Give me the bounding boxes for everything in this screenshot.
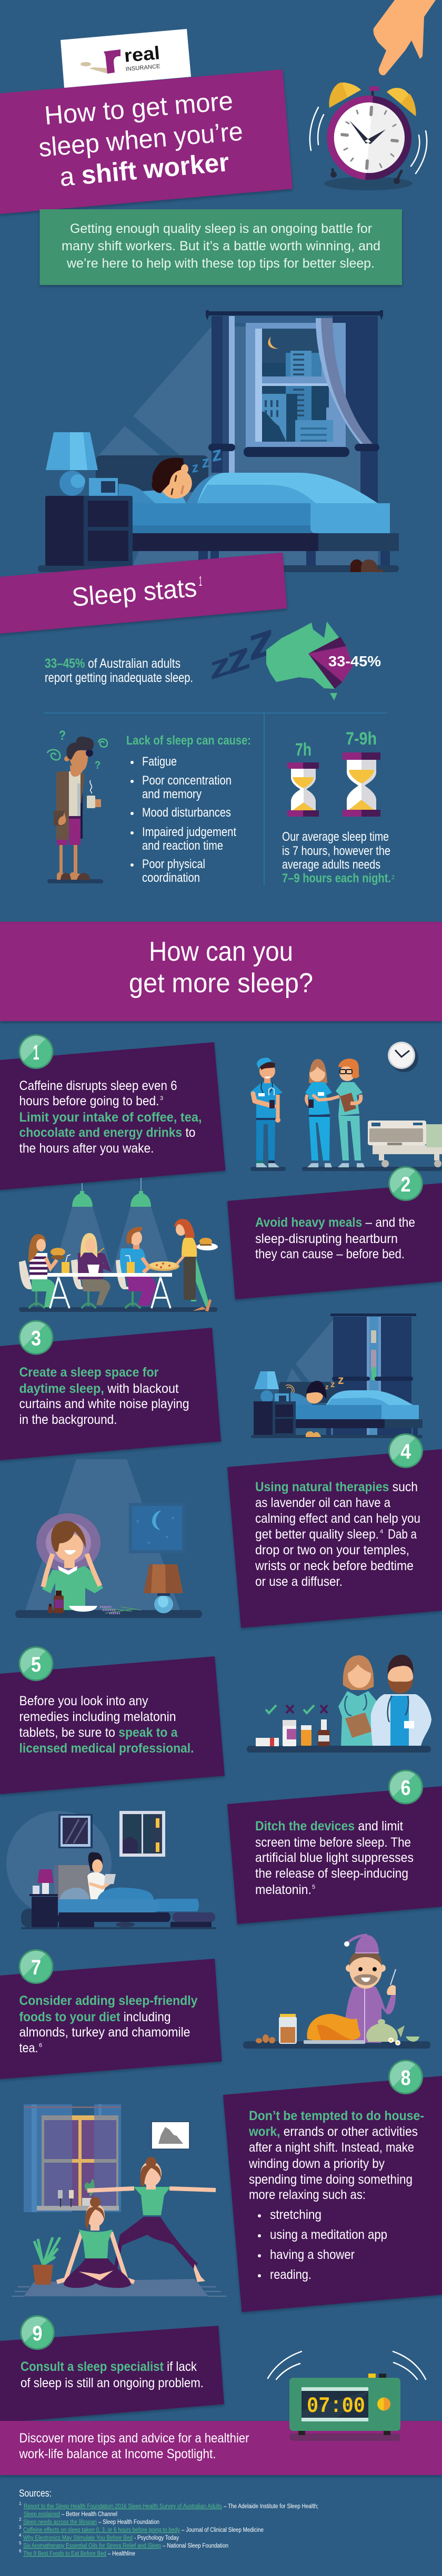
blackout curtains <box>330 1314 416 1435</box>
closing banner <box>0 2421 442 2475</box>
illustration: daytime sleeper with blackout curtains <box>251 1314 423 1438</box>
banner: sleep stats: 1 <box>199 573 202 589</box>
clock display: 07:00 <box>307 2394 365 2419</box>
illustration: people eating at table <box>19 1178 218 1312</box>
tip 6 text: melatonin. <box>255 1882 312 1897</box>
title <box>37 86 244 192</box>
nightstand <box>254 1401 296 1435</box>
intro text <box>62 221 380 271</box>
tip 1 text: the hours after you wake. <box>19 1141 154 1156</box>
tip 6 text: 5 <box>312 1884 315 1890</box>
source notes: – Healthline <box>108 2551 135 2557</box>
source notes: 3 <box>19 2525 22 2530</box>
list heading: Lack of sleep can cause: <box>126 734 251 748</box>
teapot and cup <box>366 2019 419 2045</box>
tip 4 panel <box>227 1433 442 1628</box>
standing woman <box>87 2157 216 2287</box>
slippers <box>306 1431 321 1437</box>
snore zzz <box>325 1373 344 1391</box>
snore zzz: z <box>209 443 224 466</box>
source notes: 5 <box>19 2541 22 2546</box>
title: How to get more <box>43 86 234 130</box>
text: average sleep time <box>282 830 395 885</box>
legs and slippers <box>59 845 63 873</box>
jar <box>279 2014 297 2044</box>
source notes: 1 <box>19 2501 22 2506</box>
tip 4 text <box>255 1480 420 1589</box>
text: average sleep time: 7–9 hours each night. <box>282 871 391 885</box>
text: average sleep time: Our average sleep time <box>282 830 389 844</box>
tip 4 text: Dab a <box>388 1527 417 1542</box>
source notes: – Journal of Clinical Sleep Medicine <box>182 2527 264 2533</box>
logo card <box>61 29 191 88</box>
night window: * <box>136 1518 139 1526</box>
logo wordmark: real <box>123 43 160 66</box>
diner 3 <box>116 1227 156 1308</box>
tip 5 text: licensed medical professional. <box>19 1741 194 1756</box>
nurse 3 <box>336 1058 365 1167</box>
badge 8: 8 <box>401 2066 410 2090</box>
hand <box>58 812 66 825</box>
bed <box>21 1865 216 1929</box>
intro text: we’re here to help with these top tips for better sleep. <box>66 256 375 271</box>
window with curtains <box>24 2104 121 2212</box>
tip 2 text: sleep-disrupting heartburn <box>255 1231 398 1246</box>
snore zzz: z <box>325 1383 329 1391</box>
tip 6 text: the release of sleep-inducing <box>255 1866 408 1881</box>
sources <box>19 2488 318 2557</box>
curtains <box>212 316 378 505</box>
tip 8 text <box>248 2109 424 2202</box>
shelf <box>247 1746 431 1753</box>
tip 4 text: as lavender oil can have a <box>255 1495 390 1510</box>
tip 5 text: remedies including melatonin <box>19 1709 176 1724</box>
tip 1 text <box>19 1078 202 1156</box>
nurse 1 <box>250 1058 283 1167</box>
badge 3: 3 <box>31 1327 41 1350</box>
tip 8 bullet list: using a meditation app <box>270 2227 387 2242</box>
tip 9 text: of sleep is still an ongoing problem. <box>21 2376 204 2390</box>
tip 8 text: more relaxing such as: <box>249 2187 366 2202</box>
nightstand and lamp <box>29 1869 58 1927</box>
source notes: 6 <box>19 2549 22 2553</box>
tip 8 text: Don’t be tempted to do house- <box>249 2109 424 2123</box>
tip 8 text: work, errands or other activities <box>248 2124 418 2139</box>
badge 5 <box>19 1646 54 1681</box>
tip 8 bullet list: stretching <box>270 2207 322 2222</box>
tip 3 text: daytime sleep, with blackout <box>19 1381 179 1396</box>
icon: digital alarm clock <box>268 2351 426 2441</box>
tip 2 text <box>255 1215 415 1261</box>
illustration: sleeping person in bedroom <box>38 310 399 572</box>
t-shirt <box>69 771 81 816</box>
mug <box>87 780 101 808</box>
tip 9 text <box>21 2359 204 2390</box>
stat text: inadequate sleep: 33–45% of Australian adults <box>45 656 180 671</box>
value labels: 7h <box>295 740 312 760</box>
almonds <box>256 2034 275 2043</box>
badge 9: 9 <box>33 2322 42 2345</box>
intro text: Getting enough quality sleep is an ongoing battle for <box>70 221 372 236</box>
big zzz <box>203 614 282 686</box>
tip 5 text: tablets, be sure to speak to a <box>19 1725 178 1740</box>
illustration: man in pyjamas with sleep-friendly food <box>243 1935 430 2049</box>
shelf <box>243 2041 430 2049</box>
table lamp <box>144 1564 183 1613</box>
list: effects of lack of sleep: Poor physical <box>142 857 205 871</box>
tip 1 text: Caffeine disrupts sleep even 6 <box>19 1078 177 1093</box>
badge 9 <box>20 2315 55 2350</box>
tip 5 text: Before you look into any <box>19 1694 148 1708</box>
source notes: Why Electronics May Stimulate You Before Bed <box>23 2535 133 2541</box>
source notes: Sleep explained <box>24 2511 60 2518</box>
sitting woman <box>57 2197 134 2288</box>
nightstand <box>45 496 133 566</box>
shelf <box>15 1610 202 1618</box>
snore zzz: z <box>189 459 200 476</box>
tip 1 text: Limit your intake of coffee, tea, <box>19 1110 202 1125</box>
night window <box>129 1503 185 1553</box>
night window: * <box>166 1534 169 1542</box>
badge 1 <box>19 1034 54 1069</box>
head <box>64 737 94 777</box>
illustration: woman applying lavender oil <box>15 1459 202 1618</box>
tip 2 text: they can cause – before bed. <box>255 1247 405 1261</box>
tip 3 text: Create a sleep space for <box>19 1365 159 1380</box>
white noise symbol <box>286 1385 294 1393</box>
check and cross marks <box>266 1705 327 1713</box>
tip 4 text: drop or two on your temples, <box>255 1543 409 1557</box>
source notes <box>19 2501 318 2557</box>
question marks and spirals: ? <box>59 728 66 743</box>
tip 6 text: artificial blue light suppresses <box>255 1850 414 1865</box>
waitress <box>174 1219 218 1311</box>
tip 4 text: wrists or neck before bedtime <box>255 1559 414 1573</box>
list: effects of lack of sleep: Fatigue <box>142 755 177 769</box>
tip 4 text: 4 <box>380 1529 383 1535</box>
list: effects of lack of sleep: and memory <box>142 787 202 801</box>
illustration: yoga <box>12 2104 226 2296</box>
medicines <box>256 1719 330 1746</box>
bullets <box>130 761 134 867</box>
hourglass 7-9h <box>343 752 380 817</box>
tip 4 text: or use a diffuser. <box>255 1574 343 1589</box>
doctor <box>371 1655 431 1746</box>
tip 3 panel <box>0 1320 221 1460</box>
closing text: Discover more tips and advice for a healthier <box>19 2431 249 2446</box>
list: effects of lack of sleep: and reaction time <box>142 839 223 853</box>
value labels <box>295 729 377 760</box>
tip 4 text: get better quality sleep. <box>255 1527 379 1542</box>
tip 8 text: after a night shift. Instead, make <box>249 2140 414 2155</box>
source notes: – Sleep Health Foundation <box>98 2519 159 2526</box>
source notes: 2 <box>19 2517 22 2522</box>
tip 4 text: Using natural therapies such <box>255 1480 418 1494</box>
heading: get more sleep? <box>129 968 313 999</box>
badge 4 <box>388 1433 423 1468</box>
big zzz: z <box>219 635 256 683</box>
snore zzz: z <box>330 1379 335 1389</box>
bed <box>96 455 399 566</box>
tip 7 text: 6 <box>39 2042 42 2049</box>
tip 8 text: winding down a priority by <box>248 2156 385 2171</box>
source notes: – National Sleep Foundation <box>163 2543 228 2549</box>
badge 6: 6 <box>401 1776 410 1799</box>
source notes: Caffeine effects on sleep taken 0, 3, or 6 hours before going to bedy <box>23 2527 180 2533</box>
banner: sleep stats <box>0 553 287 634</box>
tip 7 text: foods to your diet including <box>19 2010 170 2024</box>
tip 7 panel <box>0 1949 222 2079</box>
tip 3 text: in the background. <box>19 1412 117 1427</box>
tip 8 bullet list: reading. <box>270 2267 312 2282</box>
source notes: Six Aromatherapy Essential Oils for Stress Relief and Sleep <box>23 2543 161 2549</box>
badge 2 <box>388 1166 423 1201</box>
big zzz: z <box>203 647 235 686</box>
tip 1 text: chocolate and energy drinks to <box>19 1125 195 1140</box>
source notes: The 9 Best Foods to Eat Before Bed <box>23 2551 106 2557</box>
shorts <box>57 840 67 845</box>
woman <box>42 1521 103 1610</box>
bedside lamp <box>46 432 98 496</box>
text: average sleep time: is 7 hours, however the <box>282 844 390 858</box>
question marks and spirals <box>47 728 107 771</box>
logo card: INSURANCE <box>125 63 160 73</box>
tip 1 text: 3 <box>160 1095 163 1102</box>
list: effects of lack of sleep: Impaired judgement <box>142 825 236 839</box>
value labels: 7-9h <box>346 729 377 749</box>
icon: alarm clock <box>310 83 427 190</box>
tip 8 panel <box>223 2060 442 2312</box>
badge 7: 7 <box>31 1956 41 1979</box>
tip 8 text: spending time doing something <box>249 2172 413 2187</box>
closing text: work-life balance at Income Spotlight. <box>19 2447 216 2461</box>
sleeper <box>152 458 196 503</box>
tip 2 text: Avoid heavy meals – and the <box>255 1215 415 1230</box>
night window: * <box>147 1540 150 1548</box>
banner: how can you get more sleep <box>0 922 442 1021</box>
snore zzz: z <box>338 1373 344 1387</box>
chart: hourglasses 7h vs 7-9h <box>287 729 380 817</box>
source notes: Report to the Sleep Health Foundation 2016 Sleep Health Survey of Australian Adults <box>24 2503 222 2510</box>
snore zzz: z <box>199 453 211 472</box>
badge 6 <box>388 1770 423 1805</box>
woman with tablet <box>87 1852 116 1899</box>
tip 5 text <box>19 1694 194 1756</box>
text: average sleep time: average adults needs <box>282 858 380 872</box>
title: sleep when you’re <box>37 116 244 162</box>
title: a shift worker <box>58 147 230 192</box>
pendant lights <box>53 1178 172 1274</box>
source notes: – Better Health Channel <box>62 2511 117 2518</box>
list: effects of lack of sleep: Poor concentration <box>142 773 232 788</box>
sources heading: Sources: <box>19 2488 52 2499</box>
coat <box>81 783 83 839</box>
tip 1 panel <box>0 1034 225 1190</box>
illustration: nurses, clock and hospital bed <box>250 1042 442 1171</box>
badge 8 <box>388 2060 423 2094</box>
hourglass 7h <box>287 762 319 817</box>
stat text: inadequate sleep <box>45 656 193 685</box>
lavender <box>100 1607 141 1613</box>
tip 5 panel <box>0 1646 225 1794</box>
big zzz: z <box>238 614 282 670</box>
snore zzz <box>189 443 224 476</box>
tip 9 panel <box>0 2315 224 2422</box>
tip 6 panel <box>227 1770 442 1924</box>
plant <box>33 2237 60 2285</box>
badge 1: 1 <box>33 1041 39 1064</box>
turkey <box>304 2014 365 2044</box>
tip 4 text: calming effect and can help you <box>255 1511 420 1526</box>
hospital bed <box>368 1121 442 1167</box>
glow <box>6 1811 112 1916</box>
tip 7 text: tea. <box>19 2041 38 2055</box>
closing text <box>19 2431 249 2461</box>
tip 3 text <box>19 1365 189 1427</box>
slippers <box>350 559 383 572</box>
list: effects of lack of sleep <box>126 734 251 885</box>
heading <box>129 936 313 999</box>
intro text: many shift workers. But it’s a battle worth winning, and <box>62 239 380 253</box>
rug <box>12 2279 226 2296</box>
man <box>343 1935 396 2043</box>
text: average sleep time: 2 <box>391 874 395 881</box>
tip 8 bullet list: having a shower <box>270 2247 355 2262</box>
tip 1 text: hours before going to bed. <box>19 1094 159 1108</box>
nurse 2 <box>305 1059 339 1167</box>
logo mark <box>81 49 120 74</box>
tip 7 text <box>19 1993 198 2055</box>
icon: pointing hand <box>374 0 436 75</box>
tip 6 text <box>255 1819 414 1897</box>
bedside clock <box>89 478 118 496</box>
oil bottles and bowl <box>48 1591 97 1613</box>
tip 7 text: Consider adding sleep-friendly <box>19 1993 198 2008</box>
tip 7 text: almonds, turkey and chamomile <box>19 2025 190 2040</box>
badge 7 <box>19 1949 54 1984</box>
title banner <box>0 69 293 214</box>
lamp and clock <box>254 1371 289 1403</box>
picture <box>152 2122 189 2149</box>
picture frame <box>58 1814 93 1848</box>
heading: sleep stats: Sleep stats <box>71 573 198 612</box>
badge 3 <box>19 1320 54 1355</box>
tip 9 text: Consult a sleep specialist if lack <box>21 2359 197 2374</box>
badge 2: 2 <box>401 1173 410 1196</box>
tip 6 text: Ditch the devices and limit <box>255 1819 403 1834</box>
bed <box>279 1382 423 1435</box>
source notes: Sleep needs across the lifespan <box>23 2519 97 2526</box>
diner 2 <box>71 1233 110 1308</box>
illustration: tired man with coffee <box>47 728 107 883</box>
aura <box>36 1513 101 1572</box>
intro panel <box>40 209 402 285</box>
question marks and spirals: ? <box>95 759 101 771</box>
stat label: 33-45% <box>328 653 381 669</box>
source notes: - Psychology Today <box>134 2535 179 2541</box>
nurse <box>338 1655 379 1746</box>
heading: How can you <box>149 936 293 967</box>
night window: * <box>172 1515 175 1523</box>
table with food <box>47 1255 179 1308</box>
window <box>246 323 346 447</box>
badge 5: 5 <box>31 1653 41 1676</box>
tip 8 bullet list <box>258 2207 387 2282</box>
map of Australia with highlighted sector <box>266 622 381 700</box>
illustration: doctors and medicines <box>247 1655 431 1753</box>
wall clock <box>388 1042 418 1072</box>
light beam <box>25 1459 180 1610</box>
daytime sleeper <box>304 1381 327 1406</box>
floor <box>38 565 399 572</box>
diner 1 <box>19 1234 65 1308</box>
illustration: woman using tablet in bed <box>6 1811 216 1929</box>
source notes: – The Adelaide Institute for Sleep Health; <box>224 2503 318 2510</box>
list: effects of lack of sleep: Mood disturbances <box>142 806 231 820</box>
list: effects of lack of sleep: coordination <box>142 871 200 885</box>
night window <box>119 1811 165 1857</box>
tip 3 text: curtains and white noise playing <box>19 1397 189 1411</box>
source notes: 4 <box>19 2533 22 2538</box>
tip 6 text: screen time before sleep. The <box>255 1835 411 1850</box>
tip 2 panel <box>227 1166 442 1299</box>
stat text: inadequate sleep: report getting inadequate sleep. <box>45 670 193 685</box>
badge 4: 4 <box>400 1440 411 1463</box>
